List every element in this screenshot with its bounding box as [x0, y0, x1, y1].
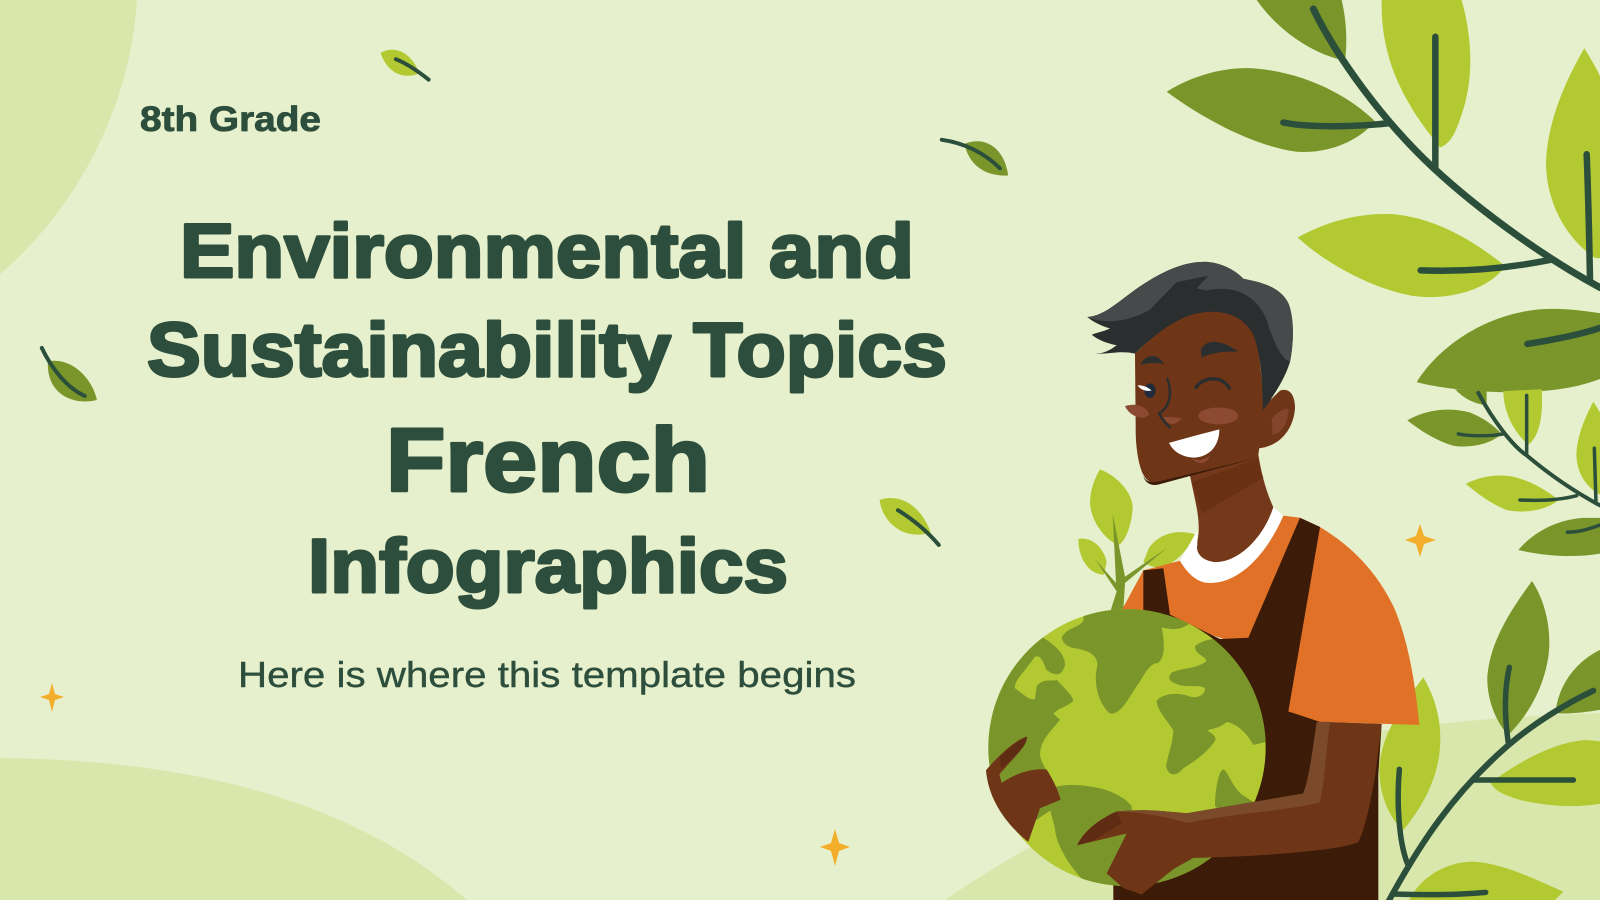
background blob: bottom right	[945, 713, 1600, 900]
sparkle: bottom	[820, 829, 850, 866]
title: Infographics	[308, 524, 788, 609]
background blob: bottom left	[0, 758, 467, 900]
subtitle: Here is where this template begins	[238, 654, 856, 695]
sparkle: right	[1405, 524, 1436, 557]
label: 8th Grade: 8th Grade	[140, 100, 321, 139]
jaw line	[1143, 458, 1257, 485]
arm right	[1077, 722, 1382, 894]
neck	[1190, 455, 1273, 562]
collar	[1180, 507, 1283, 583]
title: Environmental and	[180, 209, 914, 294]
face	[1135, 303, 1265, 483]
neck shadow	[1192, 459, 1263, 514]
overalls	[1113, 518, 1382, 900]
branch: top right	[1167, 0, 1600, 556]
leaf: upper middle	[942, 140, 1008, 176]
globe	[988, 609, 1266, 886]
sparkles	[40, 524, 1436, 866]
sprout	[1078, 469, 1196, 610]
hair	[1087, 262, 1293, 410]
sparkle: left	[40, 683, 64, 712]
character holding globe	[960, 262, 1419, 900]
shirt	[1122, 516, 1419, 725]
cheeks	[1125, 405, 1238, 424]
eyebrows	[1140, 342, 1238, 365]
leaf: centre right	[880, 498, 939, 545]
nose	[1159, 379, 1182, 427]
branch: bottom right	[1379, 581, 1600, 900]
ear	[1258, 390, 1295, 448]
title	[147, 209, 947, 609]
hand left	[986, 737, 1061, 842]
floating leaves	[42, 50, 1008, 545]
background blob: top left	[0, 0, 137, 274]
leaf: left	[42, 348, 97, 401]
title: French	[386, 411, 710, 511]
smile	[1169, 429, 1219, 463]
title: Sustainability Topics	[147, 308, 947, 393]
leaf: top	[381, 50, 429, 80]
eyes	[1138, 379, 1229, 398]
